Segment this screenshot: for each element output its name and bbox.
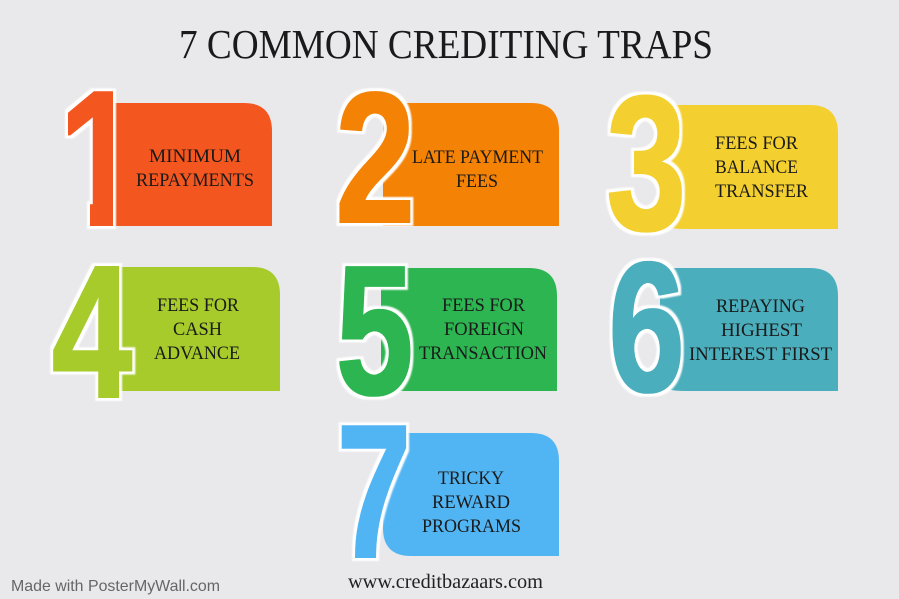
panel: minimum repayments: [65, 88, 272, 229]
label: [136, 146, 254, 191]
label: FOREIGN: [444, 319, 524, 340]
card 5: [381, 268, 557, 391]
numeral 7: 7: [337, 386, 411, 598]
label: PROGRAMS: [422, 516, 521, 537]
label: [412, 147, 543, 192]
label: [154, 295, 240, 364]
label: HIGHEST: [721, 320, 802, 341]
numeral 3: 3: [606, 56, 686, 270]
numeral 2: 2: [336, 55, 415, 262]
panel: tricky reward programs: [337, 386, 559, 598]
label: FEES FOR: [715, 133, 798, 154]
card 7: [383, 433, 559, 556]
label: LATE PAYMENT: [412, 147, 543, 168]
label: FEES: [456, 171, 498, 192]
numeral 5: 5: [336, 227, 413, 434]
card 3: [660, 105, 838, 229]
card 6: [660, 268, 838, 391]
label: ADVANCE: [154, 343, 240, 364]
numeral 6: 6: [608, 225, 685, 431]
card 1: [110, 103, 272, 226]
panel: fees for foreign transaction: [336, 227, 557, 434]
card 2: [383, 103, 559, 226]
label: [689, 296, 832, 365]
panel: repaying highest interest first: [608, 225, 838, 431]
panel: fees for balance transfer: [606, 56, 838, 270]
label: CASH: [173, 319, 222, 340]
label: FEES FOR: [157, 295, 239, 316]
label: BALANCE: [715, 157, 798, 178]
label: [419, 295, 547, 364]
watermark: Made with PosterMyWall.com: [11, 578, 220, 595]
website: www.creditbazaars.com: [348, 571, 543, 593]
title: 7 COMMON CREDITING TRAPS: [179, 21, 713, 67]
label: REWARD: [432, 492, 510, 513]
label: [715, 133, 808, 202]
numeral 1: 1: [59, 51, 142, 266]
panel: late payment fees: [336, 55, 559, 262]
label: INTEREST FIRST: [689, 344, 832, 365]
card 4: [120, 267, 280, 391]
label: [422, 468, 521, 537]
numeral 4: 4: [52, 226, 132, 437]
panel: fees for cash advance: [52, 226, 280, 437]
label: TRANSFER: [715, 181, 808, 202]
label: TRICKY: [438, 468, 504, 489]
label: FEES FOR: [442, 295, 525, 316]
label: REPAYMENTS: [136, 170, 254, 191]
label: TRANSACTION: [419, 343, 547, 364]
label: MINIMUM: [149, 146, 241, 167]
label: REPAYING: [716, 296, 805, 317]
